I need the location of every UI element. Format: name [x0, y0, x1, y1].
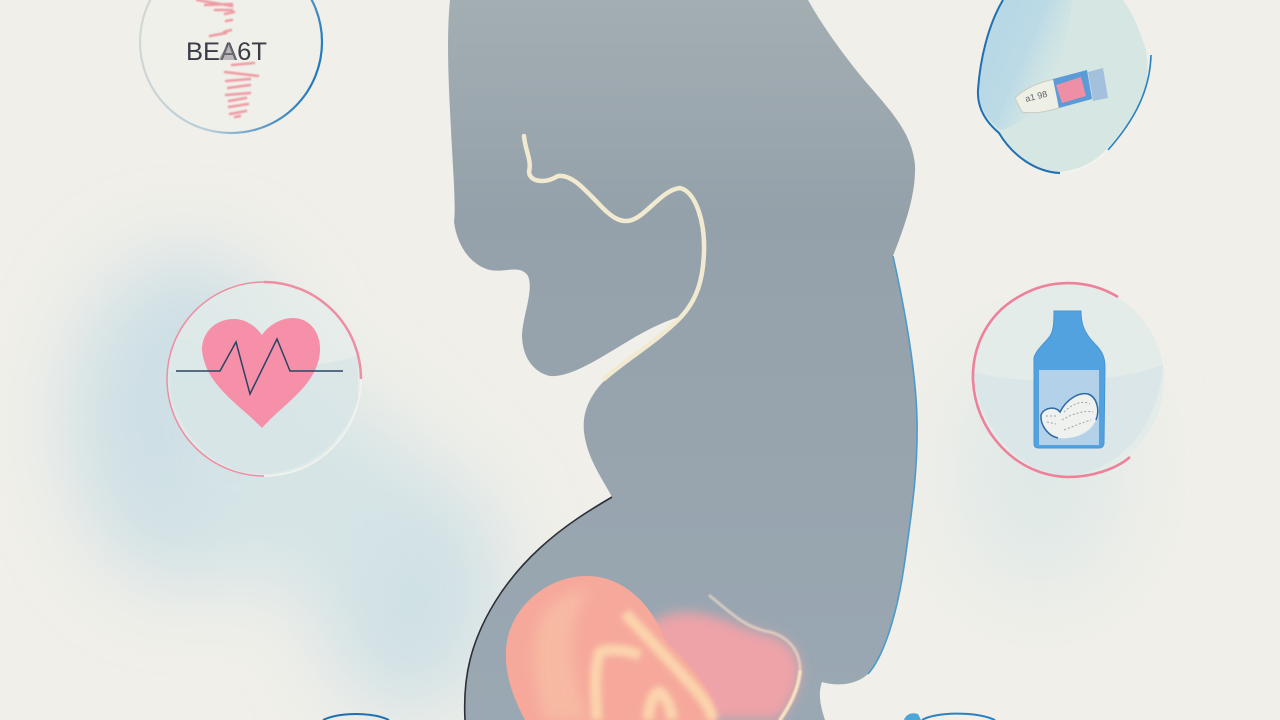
bottle — [1034, 311, 1105, 448]
icon: bottom left circle arc — [323, 714, 389, 720]
bubble blue shade — [978, 0, 1072, 130]
umbilical cord — [524, 136, 704, 379]
icon: bottom right circle arc — [904, 713, 995, 720]
ring — [973, 283, 1130, 477]
silhouette right edge highlight — [868, 256, 917, 674]
test strip — [1015, 68, 1108, 113]
fetus highlight — [535, 590, 590, 720]
label overlay triangle — [218, 42, 237, 60]
icon: test strip bubble — [978, 0, 1151, 173]
heart — [202, 318, 320, 428]
fetus and womb — [506, 576, 800, 720]
womb edge line upper — [710, 596, 800, 672]
icon: heart with pulse — [167, 282, 361, 476]
icon: bottle with fetus — [972, 283, 1164, 477]
fetus head — [506, 576, 716, 720]
embryo — [1041, 394, 1098, 438]
womb glow — [640, 612, 800, 720]
silhouette of pregnant woman — [448, 0, 917, 720]
pink scribble — [197, 0, 258, 117]
womb edge line lower — [780, 672, 800, 720]
fetus limb folds — [595, 613, 713, 720]
background blue wash right — [955, 350, 1125, 590]
test strip: a1 98 — [1024, 89, 1048, 104]
pulse line — [176, 339, 343, 394]
silhouette belly outline — [465, 497, 612, 720]
bottle label — [1039, 370, 1099, 445]
icon: heartbeat scan circle — [140, 0, 322, 133]
label: BEA6T — [186, 38, 267, 66]
background blue wash left — [70, 255, 500, 715]
ring — [264, 282, 361, 379]
